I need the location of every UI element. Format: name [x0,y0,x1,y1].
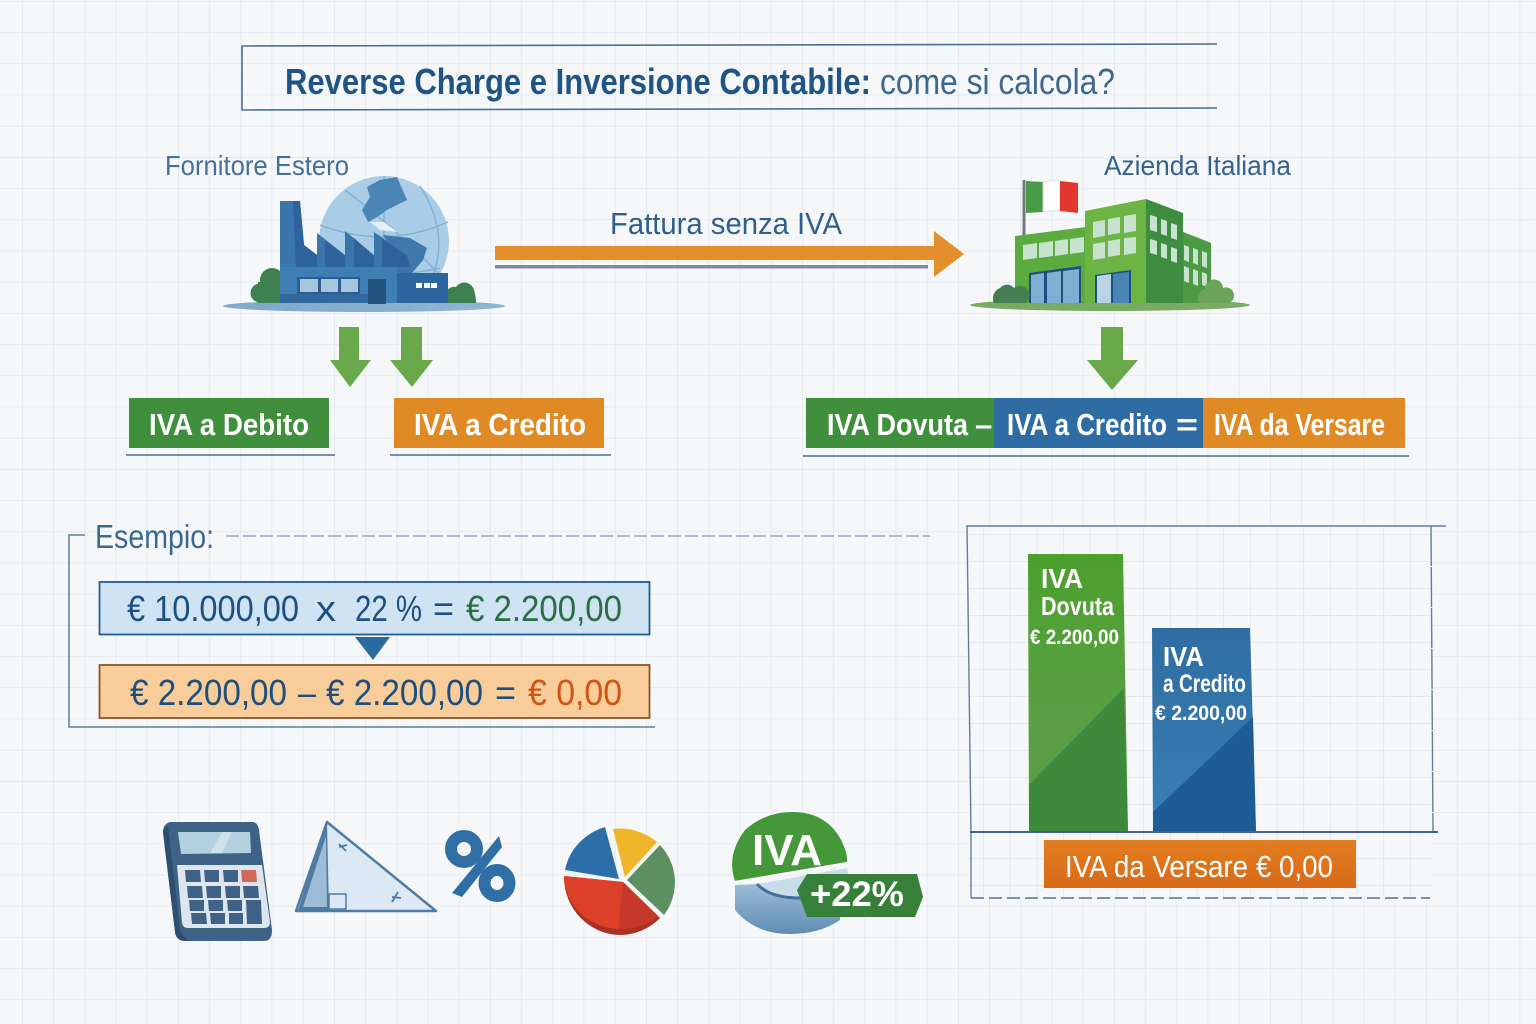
icon: Italian company building with flag [970,180,1250,311]
label: Fattura senza IVA: Fattura senza IVA [610,206,842,241]
formula bar: IVA Dovuta minus IVA a Credito equals IVA da Versare [803,398,1409,456]
title [242,44,1217,110]
formula box: saldo: – [298,672,316,713]
box: IVA a Debito [126,398,335,455]
panel: bar chart [967,526,1446,898]
callout: IVA da Versare [1044,840,1356,888]
arrow: right green arrow [390,327,433,387]
formula bar: IVA Dovuta minus IVA a Credito equals IVA da Versare: IVA Dovuta [827,407,969,442]
callout: IVA da Versare: IVA da Versare € 0,00 [1065,849,1333,884]
icon: set square triangle [296,822,436,911]
icon: IVA badge +22%: IVA [752,826,822,875]
bar: IVA Dovuta: IVA [1041,563,1083,594]
arrow: formula down triangle [355,637,390,660]
arrow: left green arrow [330,327,371,387]
formula bar: IVA Dovuta minus IVA a Credito equals IVA da Versare: = [1176,407,1198,442]
bar: IVA Dovuta [1028,554,1128,832]
label: Azienda Italiana: Azienda Italiana [1104,150,1291,181]
bar: IVA a Credito [1152,628,1256,832]
box: IVA a Debito: IVA a Debito [149,407,309,442]
icon: IVA badge +22%: +22% [810,875,904,914]
formula box: saldo: € 2.200,00 [130,672,287,713]
bar: IVA Dovuta: Dovuta [1041,591,1114,621]
icon: IVA badge +22% [732,812,923,934]
formula box: imposta: € 2.200,00 [466,588,622,629]
factory building [280,201,448,304]
formula box: saldo: € 0,00 [528,672,622,713]
icon: percent sign [451,836,510,897]
title: come si calcola? [880,61,1115,102]
formula bar: IVA Dovuta minus IVA a Credito equals IVA da Versare: IVA a Credito [1007,407,1167,442]
title: Reverse Charge e Inversione Contabile: [285,61,871,102]
icon: pie chart [564,827,675,935]
formula box: imposta: 22 % [355,588,422,629]
formula box: saldo [100,665,650,718]
arrow: company down arrow [1087,327,1138,390]
bar: IVA a Credito: € 2.200,00 [1155,702,1247,725]
bar: IVA Dovuta: € 2.200,00 [1030,626,1119,649]
formula box: saldo: = [495,672,516,713]
formula bar: IVA Dovuta minus IVA a Credito equals IVA da Versare: IVA da Versare [1214,407,1385,442]
formula bar: IVA Dovuta minus IVA a Credito equals IVA da Versare: – [975,407,992,442]
formula box: imposta: = [433,588,454,629]
label: Fornitore Estero: Fornitore Estero [165,150,349,181]
formula box: imposta: x [316,588,336,629]
formula box: imposta [100,582,650,634]
icon: calculator [163,822,272,941]
bar: IVA a Credito: IVA [1163,641,1204,672]
formula box: saldo: € 2.200,00 [326,672,483,713]
heading: Esempio: Esempio: [95,518,214,555]
bar: IVA a Credito: a Credito [1163,670,1246,698]
arrow: invoice flow [495,231,964,277]
box: IVA a Credito: IVA a Credito [414,407,586,442]
formula box: imposta: € 10.000,00 [127,588,299,629]
icon: factory and globe [223,176,505,312]
box: IVA a Credito [390,398,611,455]
panel: Esempio [69,518,930,727]
